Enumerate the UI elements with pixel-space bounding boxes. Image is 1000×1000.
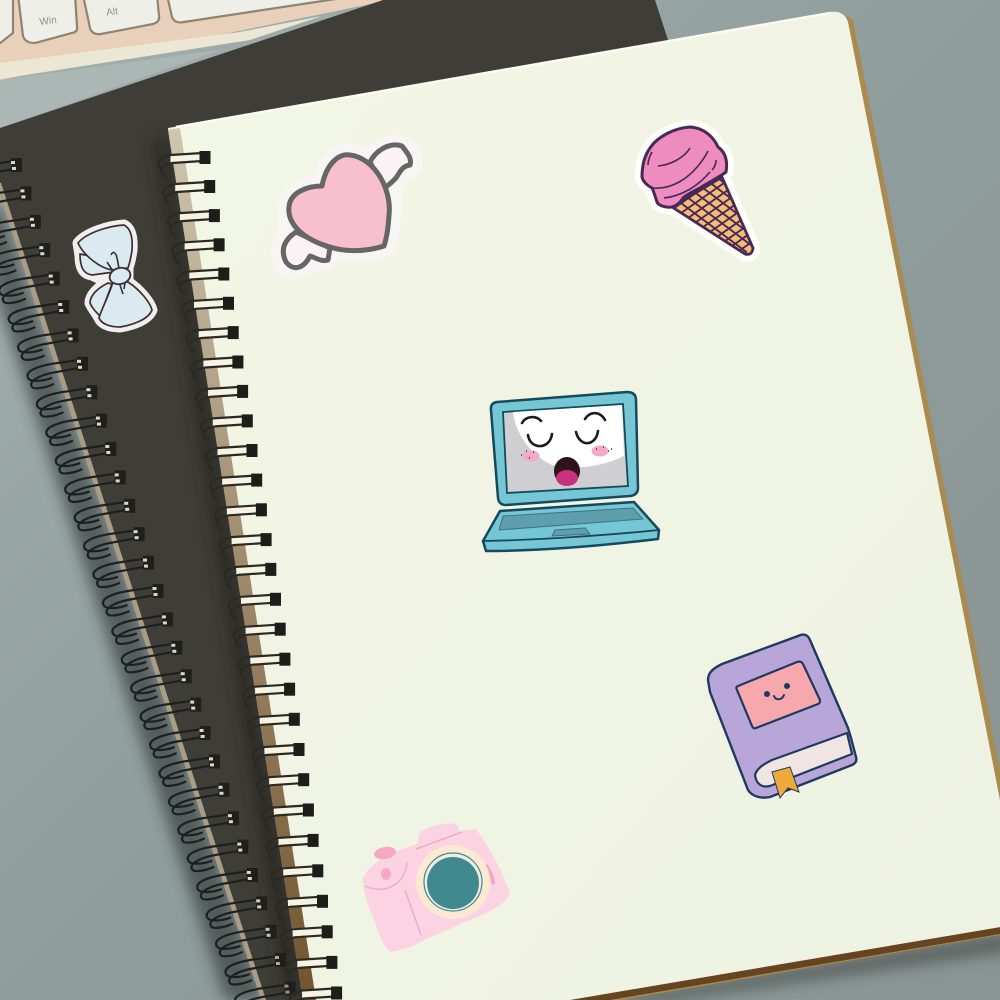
keyboard key: spacebar (167, 0, 362, 22)
sticker: smiling book (708, 635, 856, 798)
book bookmark (772, 767, 799, 798)
front notebook spirals (158, 151, 342, 1000)
sticker: pink camera (363, 823, 510, 952)
laptop base (483, 502, 659, 551)
keyboard key: Alt: Alt (106, 6, 119, 19)
book cover (708, 635, 856, 798)
shadow beside back notebook (0, 200, 263, 1000)
laptop display (503, 404, 628, 493)
front notebook golden page edge (560, 16, 1000, 1000)
book label (736, 662, 820, 728)
sticker: ice cream cone (634, 120, 760, 262)
keyboard key: Win (18, 0, 77, 43)
front notebook bottom brown edge (566, 926, 1000, 1000)
back notebook spine strip (0, 183, 266, 1000)
shadow under front notebook bottom edge (600, 932, 1000, 1000)
keyboard key: Win: Win (39, 15, 57, 28)
book pages (755, 733, 852, 787)
back notebook cover (0, 0, 668, 1000)
page top highlight (176, 13, 830, 127)
laptop screen frame (491, 392, 638, 505)
keyboard (0, 0, 390, 80)
keyboard key: Alt (83, 0, 159, 34)
laptop face (513, 405, 624, 486)
sticker: sleepy laptop (483, 392, 659, 551)
sticker: bow (78, 225, 152, 327)
sticker: winged heart (282, 145, 412, 268)
keyboard key: left (0, 0, 13, 47)
front notebook spine strip (168, 128, 316, 1000)
light desk reflection below keyboard (0, 50, 220, 128)
back notebook spirals (0, 158, 296, 1000)
shadow of front notebook on back cover (152, 135, 304, 1000)
